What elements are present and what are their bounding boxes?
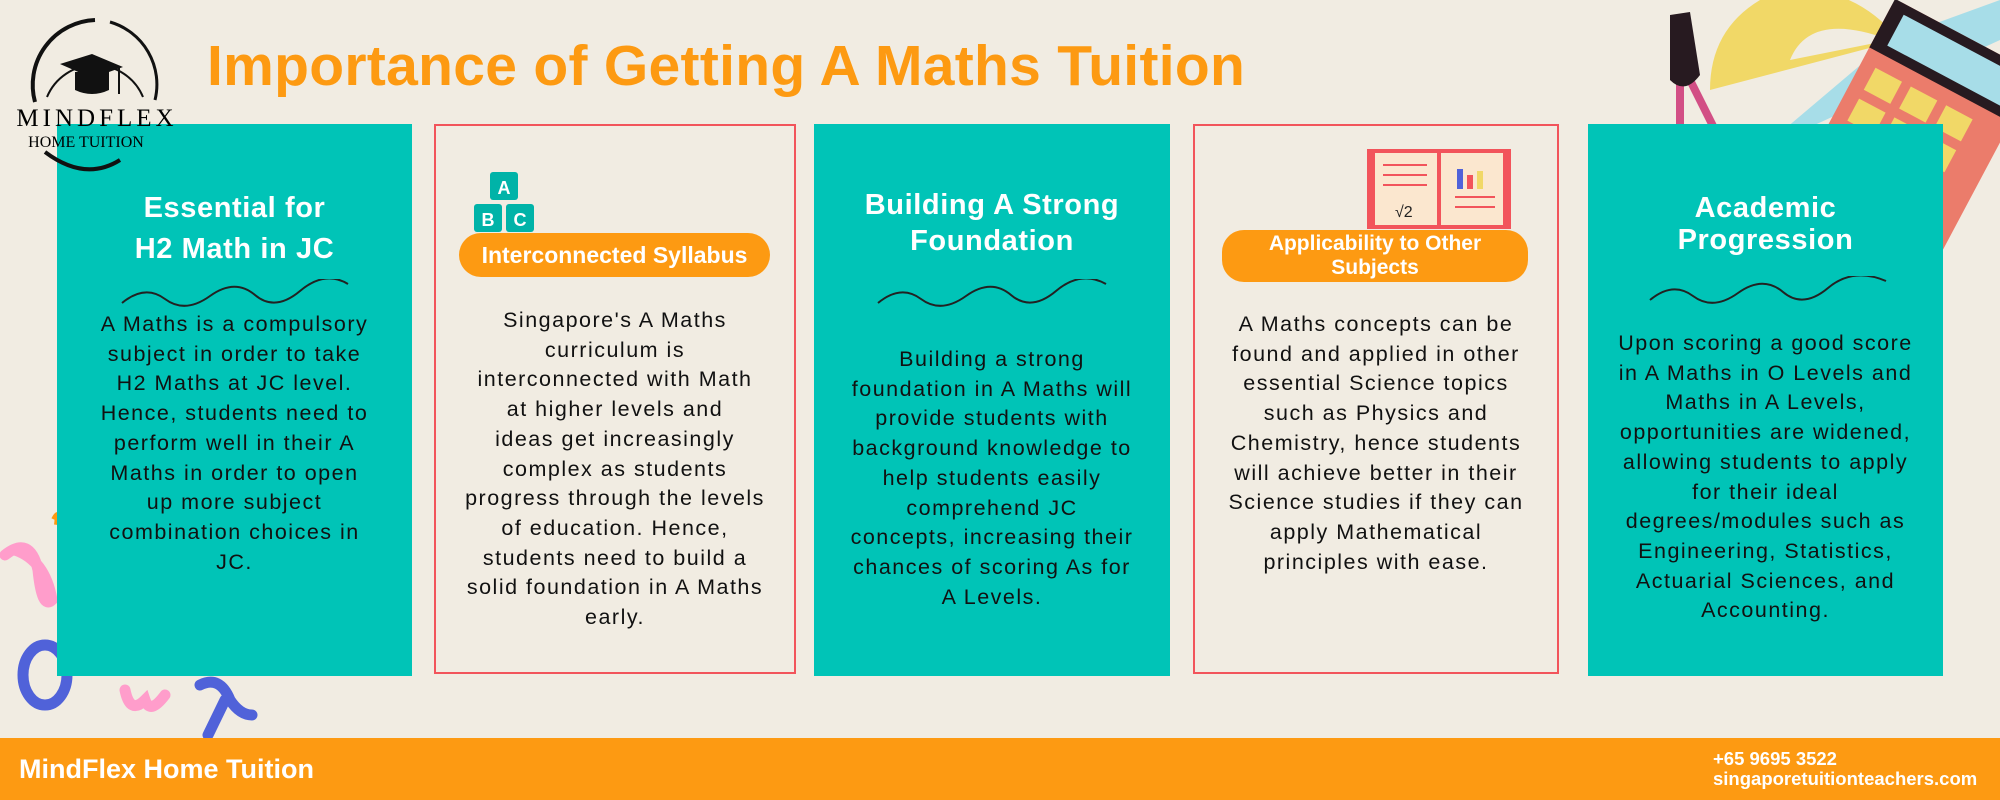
panel: Academic Progression: for their ideal bbox=[1692, 480, 1839, 504]
decorative doodles bbox=[0, 512, 258, 738]
panel: Academic Progression: Upon scoring a good score bbox=[1618, 331, 1913, 355]
icon: ABC blocks: B bbox=[482, 210, 494, 230]
panel: Essential for H2 Math in JC: A Maths is a compulsory bbox=[101, 312, 368, 336]
panel: Interconnected Syllabus: complex as students bbox=[503, 457, 727, 481]
panel: Essential for H2 Math in JC: H2 Math in JC bbox=[135, 233, 334, 265]
panel: Building A Strong Foundation: foundation in A Maths will bbox=[852, 377, 1132, 401]
icon: ABC blocks bbox=[474, 172, 534, 232]
panel: Academic Progression: Engineering, Statistics, bbox=[1638, 539, 1893, 563]
panel: Academic Progression: Actuarial Sciences, and bbox=[1636, 569, 1895, 593]
panel: Academic Progression: degrees/modules such as bbox=[1626, 509, 1905, 533]
footer brand: MindFlex Home Tuition bbox=[19, 754, 314, 784]
pill: Applicability to Other Subjects: Subjects bbox=[1331, 256, 1419, 279]
footer contact: singaporetuitionteachers.com bbox=[1713, 768, 1977, 789]
panel: Essential for H2 Math in JC: combination choices in bbox=[109, 520, 360, 544]
panel: Applicability to Other Subjects: essential Science topics bbox=[1243, 371, 1509, 395]
panel: Applicability to Other Subjects: A Maths concepts can be bbox=[1239, 312, 1513, 336]
panel: Building A Strong Foundation: help students easily bbox=[883, 466, 1101, 490]
pill: Applicability to Other Subjects bbox=[1222, 230, 1528, 282]
footer contact bbox=[1713, 748, 1977, 789]
pill: Applicability to Other Subjects: Applicability to Other bbox=[1269, 232, 1481, 255]
panel: Academic Progression: Progression bbox=[1678, 224, 1853, 256]
panel: Applicability to Other Subjects: such as Physics and bbox=[1264, 401, 1488, 425]
title: Importance of Getting A Maths Tuition bbox=[207, 34, 1245, 98]
panel: Essential for H2 Math in JC bbox=[57, 124, 412, 676]
icon: open book bbox=[1367, 149, 1511, 229]
panel: Essential for H2 Math in JC: Hence, students need to bbox=[101, 401, 368, 425]
panel: Interconnected Syllabus: of education. Hence, bbox=[501, 516, 729, 540]
logo bbox=[16, 18, 178, 172]
footer contact: +65 9695 3522 bbox=[1713, 748, 1837, 769]
panel: Academic Progression: Academic bbox=[1695, 192, 1836, 224]
logo: HOME TUITION bbox=[28, 134, 144, 151]
panel: Essential for H2 Math in JC: Maths in order to open bbox=[110, 461, 359, 485]
panel: Applicability to Other Subjects: principles with ease. bbox=[1263, 550, 1489, 574]
panel: Interconnected Syllabus: early. bbox=[585, 605, 645, 629]
panel: Building A Strong Foundation: Building A Strong bbox=[865, 189, 1119, 221]
panel: Interconnected Syllabus bbox=[434, 124, 796, 674]
panel: Building A Strong Foundation: chances of scoring As for bbox=[853, 555, 1131, 579]
panel: Interconnected Syllabus: at higher levels and bbox=[507, 397, 723, 421]
decorative stationery bbox=[1670, 0, 2000, 250]
panel: Building A Strong Foundation: provide students with bbox=[875, 406, 1109, 430]
panel: Academic Progression: allowing students to apply bbox=[1623, 450, 1908, 474]
panel: Interconnected Syllabus: students need to build a bbox=[483, 546, 747, 570]
panel: Building A Strong Foundation: Foundation bbox=[910, 225, 1074, 257]
panel: Essential for H2 Math in JC: Essential for bbox=[144, 192, 325, 224]
panel: Building A Strong Foundation: Building a strong bbox=[899, 347, 1085, 371]
panel: Essential for H2 Math in JC: JC. bbox=[216, 550, 253, 574]
panel: Interconnected Syllabus: Singapore's A Maths bbox=[503, 308, 727, 332]
panel: Academic Progression bbox=[1588, 124, 1943, 676]
panel: Essential for H2 Math in JC: subject in order to take bbox=[108, 342, 361, 366]
panel: Essential for H2 Math in JC: perform well in their A bbox=[114, 431, 355, 455]
panel: Applicability to Other Subjects: found and applied in other bbox=[1232, 342, 1520, 366]
panel: Building A Strong Foundation: background knowledge to bbox=[852, 436, 1132, 460]
panel: Building A Strong Foundation: A Levels. bbox=[942, 585, 1042, 609]
panel: Academic Progression: in A Maths in O Levels and bbox=[1619, 361, 1912, 385]
panel: Applicability to Other Subjects bbox=[1193, 124, 1559, 674]
panel: Interconnected Syllabus: ideas get increasingly bbox=[495, 427, 735, 451]
panel: Interconnected Syllabus: interconnected with Math bbox=[477, 367, 753, 391]
icon: ABC blocks: C bbox=[514, 210, 526, 230]
panel: Applicability to Other Subjects: will achieve better in their bbox=[1234, 461, 1518, 485]
panel: Academic Progression: Maths in A Levels, bbox=[1665, 390, 1866, 414]
panel: Building A Strong Foundation bbox=[814, 124, 1170, 676]
panel: Essential for H2 Math in JC: H2 Maths at JC level. bbox=[117, 371, 352, 395]
panel: Building A Strong Foundation: comprehend JC bbox=[906, 496, 1078, 520]
panel: Applicability to Other Subjects: Science studies if they can bbox=[1228, 490, 1524, 514]
panel: Applicability to Other Subjects: Chemistry, hence students bbox=[1231, 431, 1521, 455]
panel: Essential for H2 Math in JC: up more subject bbox=[147, 490, 322, 514]
logo: MINDFLEX bbox=[16, 105, 178, 132]
panel: Interconnected Syllabus: solid foundation in A Maths bbox=[467, 575, 763, 599]
panel: Academic Progression: opportunities are widened, bbox=[1620, 420, 1911, 444]
panel: Interconnected Syllabus: progress through the levels bbox=[465, 486, 765, 510]
panel: Applicability to Other Subjects: apply Mathematical bbox=[1270, 520, 1482, 544]
panel: Building A Strong Foundation: concepts, increasing their bbox=[851, 525, 1133, 549]
footer bbox=[0, 738, 2000, 800]
pill: Interconnected Syllabus bbox=[459, 233, 770, 277]
panel: Academic Progression: Accounting. bbox=[1701, 598, 1830, 622]
panel: Interconnected Syllabus: curriculum is bbox=[545, 338, 685, 362]
icon: open book: √2 bbox=[1395, 204, 1413, 221]
pill: Interconnected Syllabus: Interconnected Syllabus bbox=[482, 242, 747, 268]
icon: ABC blocks: A bbox=[498, 178, 510, 198]
